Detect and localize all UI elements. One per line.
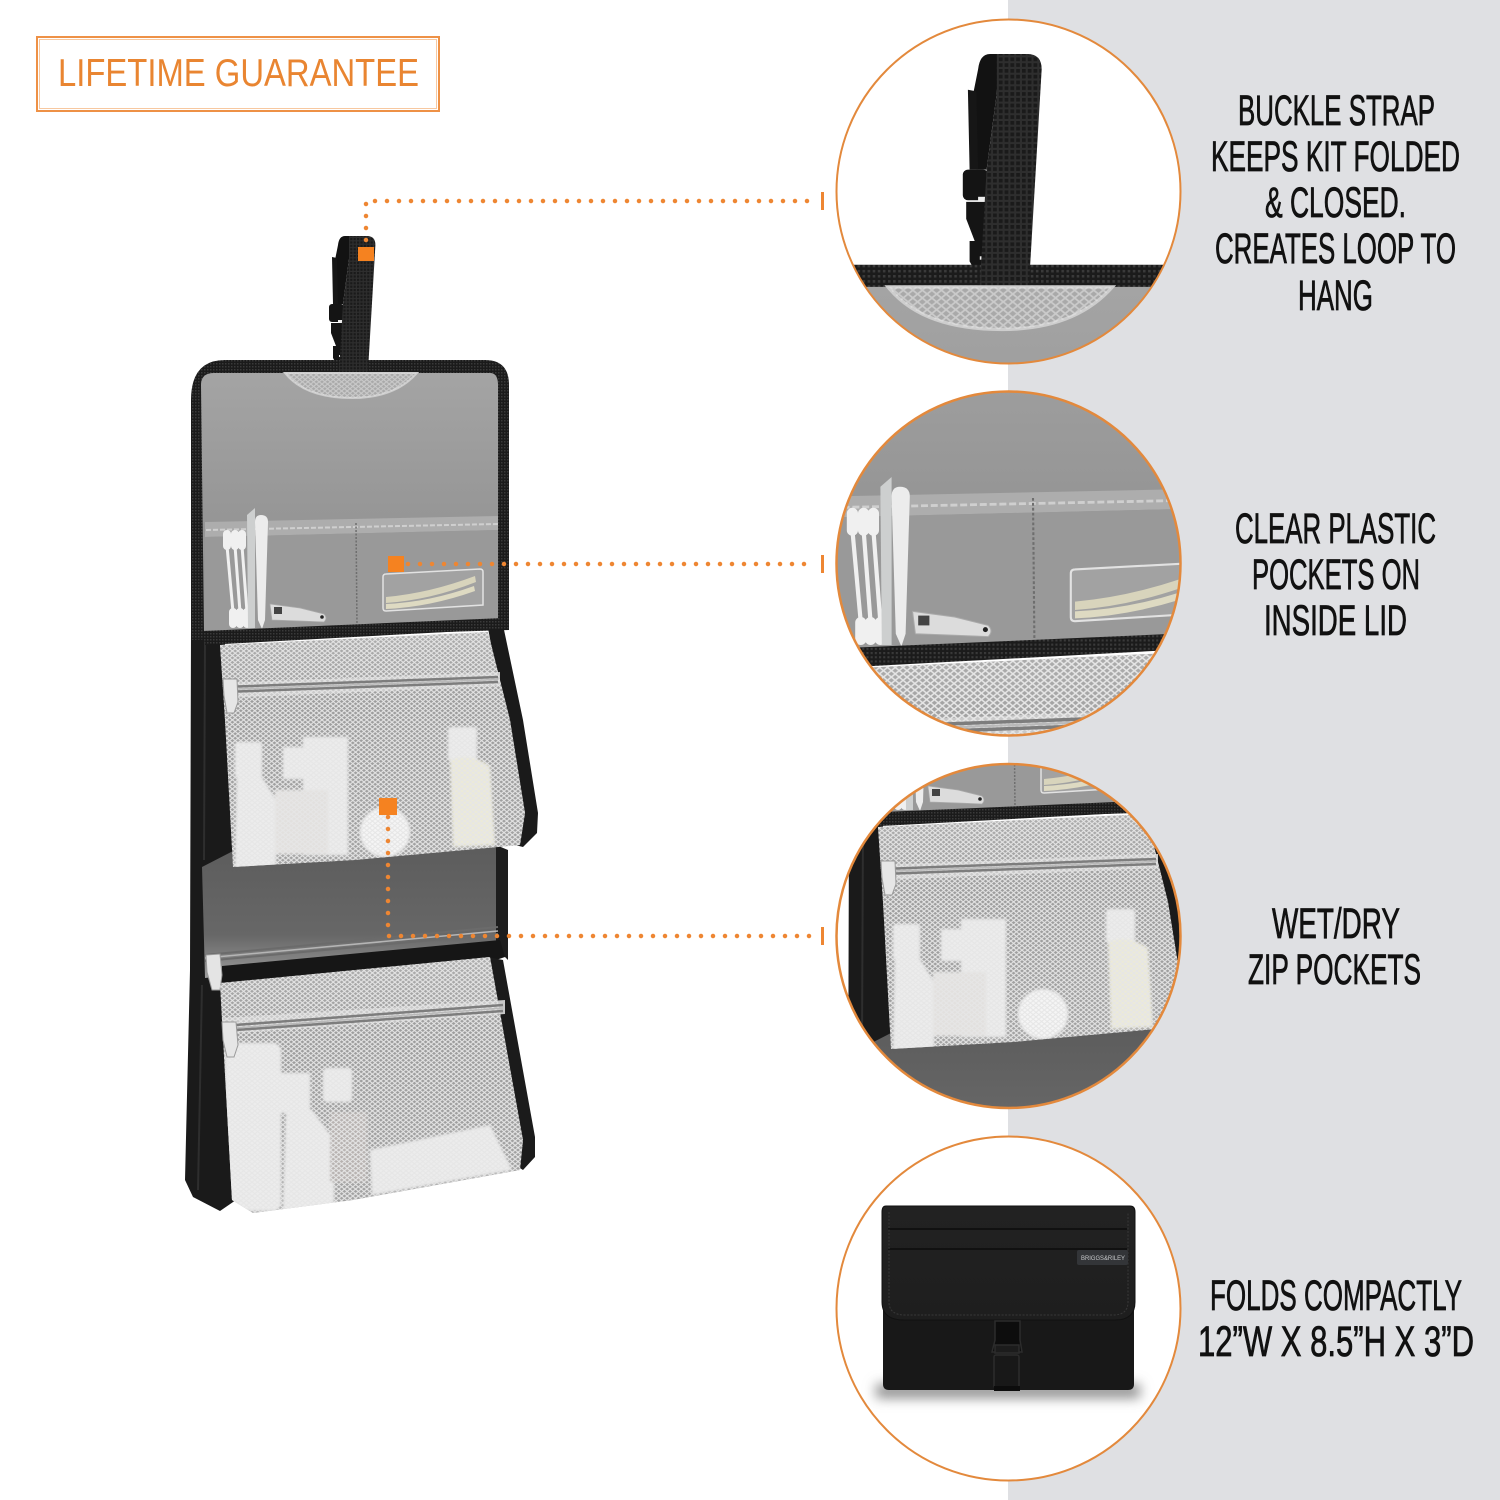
dark band between pockets <box>202 835 498 978</box>
text: folds compactly <box>1198 1272 1474 1366</box>
text: buckle strap <box>1211 87 1460 320</box>
zipper <box>222 1005 503 1031</box>
lid outer trim <box>191 360 509 640</box>
pocket contents <box>225 1043 512 1215</box>
background: grey right panel <box>1008 0 1500 1500</box>
cotton swabs <box>227 534 247 624</box>
lid lower binding <box>203 618 503 645</box>
scalloped label window <box>285 373 417 398</box>
zipper of band <box>205 927 498 961</box>
circle: buckle strap detail <box>836 18 1182 364</box>
text: wet/dry zip pockets: WET/DRY <box>1272 900 1400 948</box>
spine <box>185 630 240 1211</box>
product: unfolded hanging kit <box>185 236 538 1215</box>
interior pocket band <box>205 516 498 537</box>
nail clippers <box>270 604 326 622</box>
text: buckle strap: HANG <box>1298 272 1373 320</box>
text: wet/dry zip pockets <box>1248 900 1421 994</box>
zipper <box>223 677 498 692</box>
upper mesh pocket <box>220 625 538 868</box>
badge: lifetime guarantee <box>37 37 439 111</box>
nail files <box>247 508 268 629</box>
badge: lifetime guarantee: LIFETIME GUARANTEE <box>58 52 419 95</box>
folded body <box>883 1300 1134 1390</box>
zipper pull upper band <box>206 954 222 990</box>
buckle <box>992 1321 1022 1388</box>
clear plastic case <box>383 569 483 611</box>
folded flap <box>882 1206 1135 1320</box>
pocket contents <box>235 727 495 868</box>
text: buckle strap: & CLOSED. <box>1265 179 1406 227</box>
ground shadow <box>876 1384 1140 1398</box>
top section: strap and lid <box>191 236 509 640</box>
callout dots: lid pockets <box>388 555 824 573</box>
logo plate: BRIGGS&RILEY <box>1081 1255 1126 1262</box>
circle: folded kit <box>836 1136 1180 1480</box>
circle: clear plastic pockets detail <box>835 390 1182 737</box>
lower mesh pocket <box>220 957 535 1215</box>
callout dots: zip pockets <box>379 798 824 945</box>
pocket stitching <box>356 523 357 626</box>
black binding <box>222 940 505 986</box>
lid lining <box>201 373 498 632</box>
strap back and buckle <box>329 236 350 367</box>
logo plate <box>1077 1250 1128 1265</box>
strap front <box>339 236 375 372</box>
callout dots: strap <box>358 192 824 261</box>
text: clear plastic pockets <box>1235 505 1436 645</box>
circle: wet/dry zip pockets detail <box>835 762 1182 1110</box>
text: clear plastic pockets: INSIDE LID <box>1264 597 1407 645</box>
